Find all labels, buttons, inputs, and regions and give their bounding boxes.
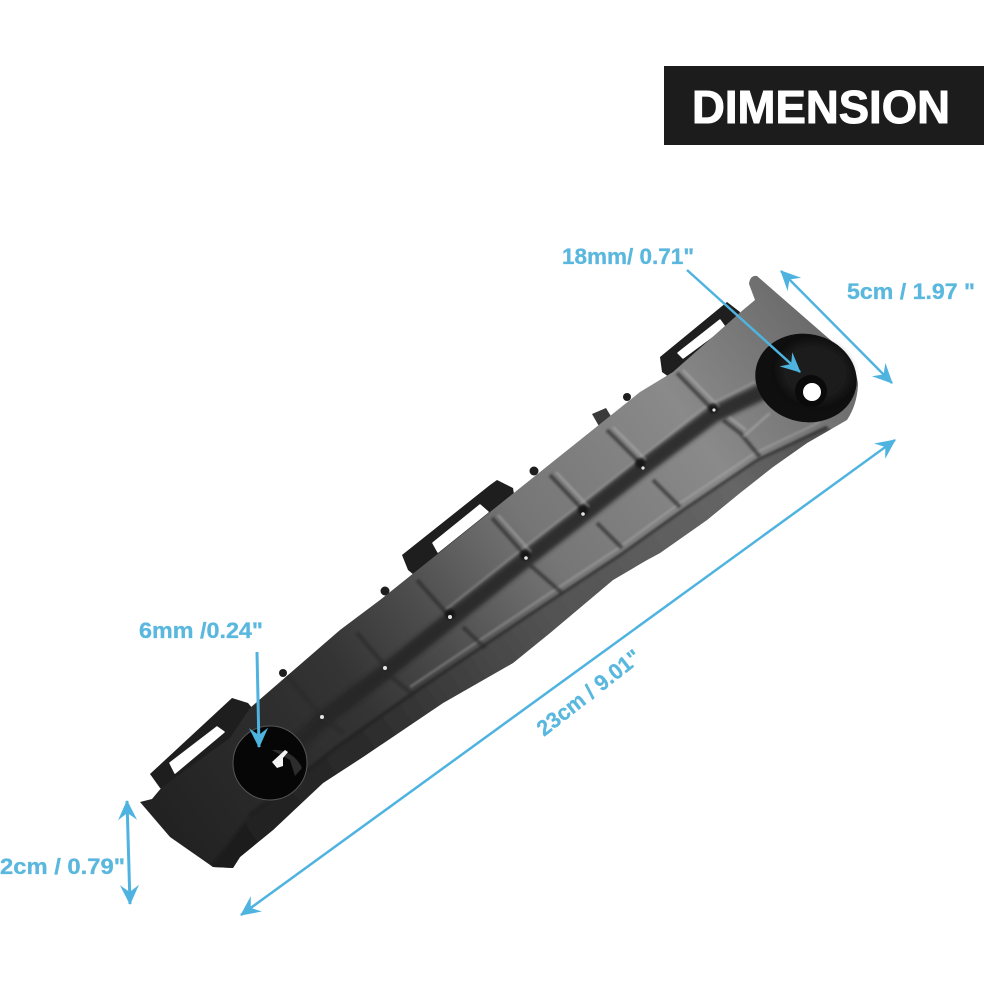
- clip tabs and studs on the upper edge: [150, 302, 740, 800]
- callout: width 5cm: 5cm / 1.97 ": [847, 279, 975, 304]
- top-right boss with screw hole: [747, 324, 865, 432]
- rivet marks: [445, 403, 718, 619]
- callout: hole 6mm: [139, 618, 263, 747]
- callout: height 2cm: [0, 801, 130, 904]
- tab slots: [170, 320, 725, 773]
- callout: hole 6mm: 6mm /0.24": [139, 618, 263, 643]
- bottom-left round socket: [233, 726, 307, 800]
- crease highlights: [498, 370, 770, 552]
- title banner: DIMENSION: DIMENSION: [692, 81, 950, 133]
- callout: width 5cm: [781, 271, 975, 383]
- central dark channel: [296, 382, 765, 746]
- lower rim band: [210, 426, 832, 868]
- bracket body: [140, 276, 858, 868]
- bracket illustration: [140, 276, 858, 868]
- callout: height 2cm: 2cm / 0.79": [0, 854, 125, 879]
- callout: length 23cm: 23cm / 9.01": [532, 644, 646, 741]
- callout: bolt hole 18mm: 18mm/ 0.71": [562, 244, 694, 269]
- title banner: DIMENSION: [664, 66, 984, 145]
- channel highlight ridge: [445, 382, 755, 610]
- callout: bolt hole 18mm: [562, 244, 800, 372]
- rim line: [308, 425, 828, 771]
- cross creases: [286, 371, 762, 693]
